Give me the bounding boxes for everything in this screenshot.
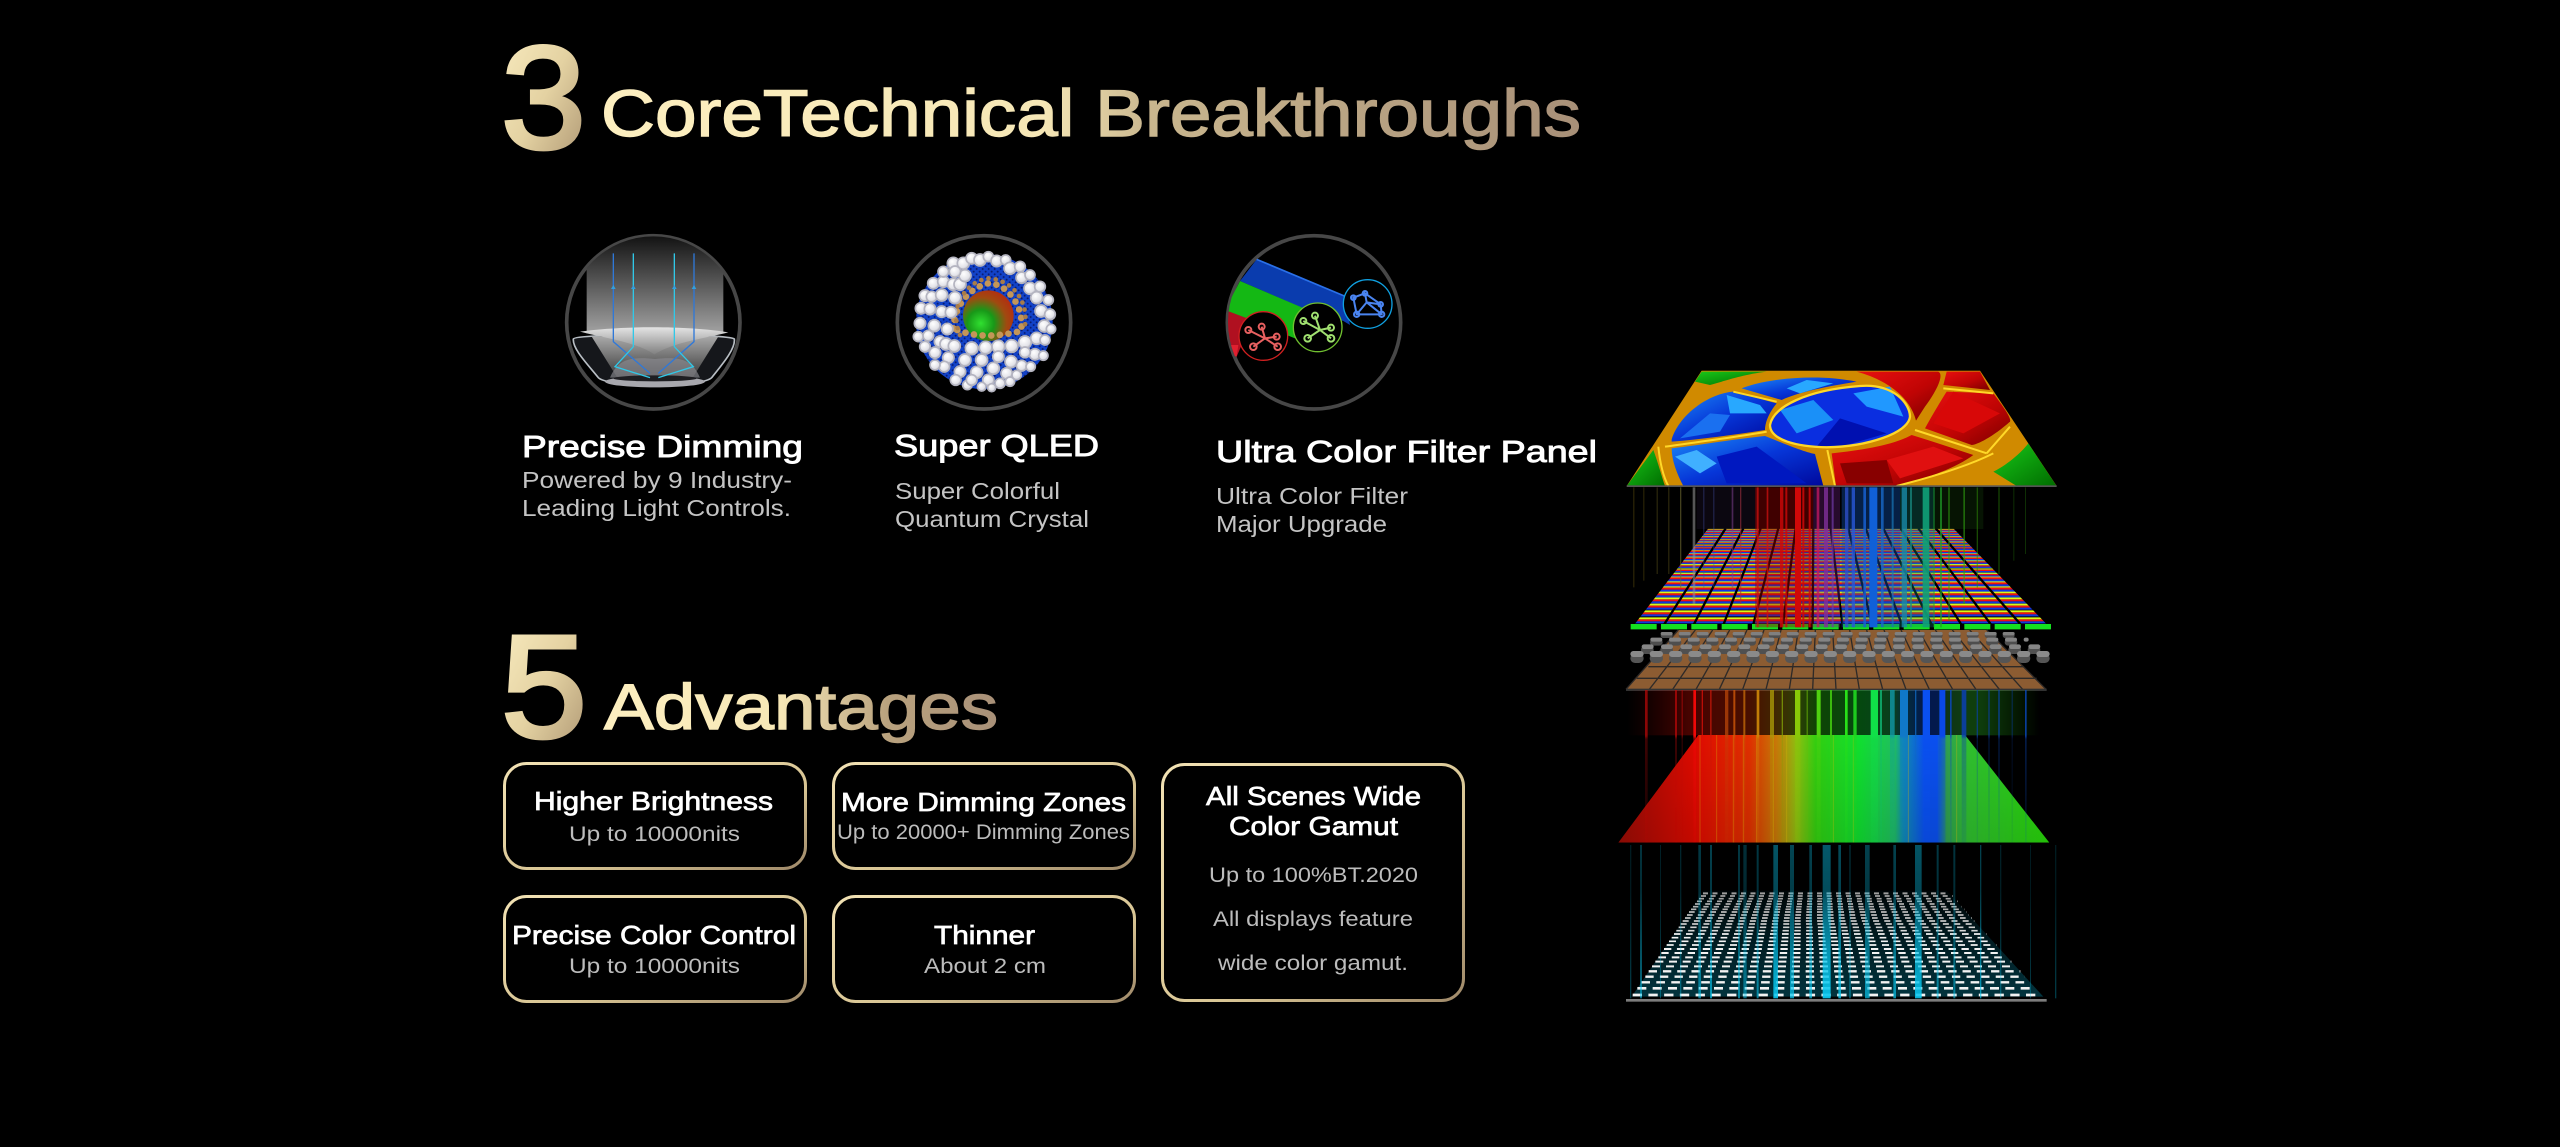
layer: gray mini LED cylinders — [1633, 634, 2050, 658]
upper layers: picture, color filter, LEDs — [1600, 370, 2080, 691]
card: thinner: Thinner — [934, 920, 1035, 950]
card: all scenes wide color gamut: All displays feature — [1213, 908, 1413, 931]
description: Quantum Crystal — [895, 506, 1089, 532]
layer: RGB sub-pixel rows — [1635, 528, 2046, 624]
description — [1216, 483, 1408, 537]
card: precise color control: Up to 10000nits — [569, 955, 740, 978]
description: Ultra Color Filter — [1216, 483, 1408, 509]
heading: Super QLED — [894, 428, 1099, 463]
card: precise color control: Precise Color Control — [512, 920, 796, 950]
card: all scenes wide color gamut — [1162, 764, 1464, 1000]
heading: Ultra Color Filter Panel — [1216, 434, 1597, 469]
base plate — [1626, 999, 2047, 1002]
feature: precise dimming — [522, 235, 803, 521]
card: more dimming zones — [834, 764, 1134, 868]
layer: brown substrate grid — [1626, 630, 2047, 691]
layer: stained glass picture panel — [1620, 370, 2060, 487]
icon: color filter molecules — [1225, 236, 1401, 409]
cyan backlight rays — [1630, 845, 2056, 998]
card: more dimming zones: Up to 20000+ Dimming Zones — [837, 821, 1130, 844]
light rays through color filter — [1633, 487, 2026, 627]
card: all scenes wide color gamut: Color Gamut — [1229, 811, 1399, 841]
description: Major Upgrade — [1216, 511, 1387, 537]
layer: rainbow quantum film — [1617, 733, 2050, 843]
section: 5 advantages heading — [501, 605, 998, 768]
spectrum light rays — [1645, 690, 2027, 843]
heading: Precise Dimming — [522, 429, 803, 464]
card: higher brightness: Up to 10000nits — [569, 823, 740, 846]
description: Super Colorful — [895, 478, 1060, 504]
section: 3 core technical breakthroughs heading — [501, 16, 1581, 179]
card: higher brightness — [504, 764, 806, 868]
panel bottom edge — [1627, 485, 2057, 487]
icon: lens with light beam — [567, 235, 740, 409]
lower layers: quantum spectrum and backlight — [1617, 690, 2056, 1002]
front green edges of sub-pixels — [1631, 619, 2052, 635]
card: thinner — [834, 896, 1134, 1002]
spectrum glow above film — [1627, 690, 2040, 735]
advantages title: Advantages — [604, 671, 998, 743]
feature: super qled — [894, 236, 1099, 532]
card: precise color control — [504, 896, 806, 1002]
card: more dimming zones: More Dimming Zones — [841, 787, 1126, 817]
big numeral 5: 5 — [501, 605, 587, 768]
cyan glow under LED grid — [1632, 891, 2043, 997]
card: all scenes wide color gamut: All Scenes Wide — [1206, 781, 1421, 811]
description: Leading Light Controls. — [522, 495, 791, 521]
layer: white LED dot grid — [1633, 893, 2042, 995]
card: thinner: About 2 cm — [924, 955, 1046, 978]
description — [895, 478, 1089, 532]
feature: ultra color filter panel — [1216, 236, 1597, 537]
big numeral 3: 3 — [501, 16, 586, 179]
description — [522, 467, 792, 521]
card: all scenes wide color gamut: wide color gamut. — [1217, 952, 1408, 975]
icon: quantum crystal sphere — [897, 236, 1071, 409]
exploded layer diagram — [1600, 370, 2080, 1002]
description: Powered by 9 Industry- — [522, 467, 792, 493]
title text: CoreTechnical Breakthroughs — [601, 76, 1581, 150]
card: all scenes wide color gamut: Up to 100%BT.2020 — [1209, 864, 1418, 887]
card: higher brightness: Higher Brightness — [534, 786, 773, 816]
